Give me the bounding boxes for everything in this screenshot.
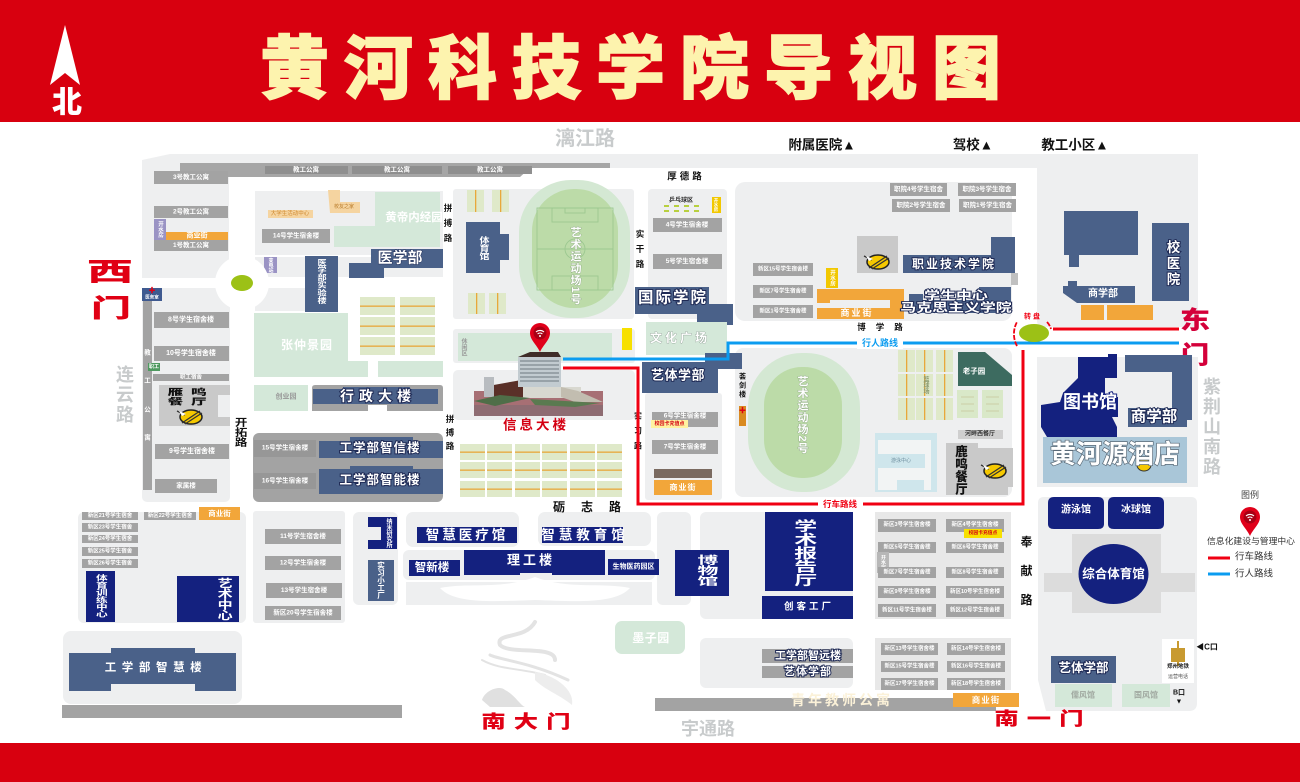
panel: 黄帝内经园 and medical school: 大学生活动中心: [271, 209, 310, 217]
panel: new district dorms north: 新区3号学生宿舍楼: [883, 520, 931, 528]
panel: stadium 2: [748, 353, 860, 492]
panel: 老子园: 老子园: [963, 366, 985, 376]
panel: 国际学院: 国际学院: [638, 288, 708, 306]
panel: 张仲景园 and courts: [254, 297, 443, 377]
panel: new district dorms north: 新区11号学生宿舍楼: [882, 606, 932, 614]
panel: gym and courts: 体育馆: [478, 235, 490, 261]
panel: west dorms: [142, 286, 230, 493]
heading: 西门: [87, 258, 133, 323]
panel: east gate roundabout: 转盘: [1024, 312, 1042, 320]
panel: 纳米研究所 and 实习工厂: [368, 517, 397, 601]
panel: 纳米研究所 and 实习工厂: 纳米研究所: [385, 517, 392, 549]
panel: vocational college area: 马克思主义学院: [900, 300, 1012, 315]
panel: west dorms: 家属楼: [176, 480, 196, 490]
panel: west dorms: 职工宿舍: [180, 372, 202, 380]
panel: 工学部智信楼 and 智能楼: 工学部智信楼: [339, 440, 421, 455]
panel: 黄帝内经园 and medical school: 黄帝内经园: [385, 210, 443, 224]
panel: tennis courts: [957, 390, 1003, 418]
panel: west new dorms: 新区24号学生宿舍: [88, 534, 133, 542]
panel: 工学部智远楼 and dorms south: 新区13号学生宿舍楼: [884, 644, 935, 652]
header band: [0, 0, 1300, 122]
panel: vocational college area: 职院4号学生宿舍: [894, 184, 944, 193]
panel: northwest staff apartments: 开水房: [157, 221, 164, 239]
road label: 拼搏路 south: 拼搏路: [445, 414, 455, 455]
heading: 西门: 门: [91, 295, 131, 323]
icon: metro logo: 运营电话: [1168, 673, 1188, 680]
panel: east courts: 篮球场: [922, 375, 929, 395]
icon: metro logo: [1162, 639, 1194, 683]
panel: 黄帝内经园 and medical school: 14号学生宿舍楼: [273, 230, 320, 240]
panel: 张仲景园 and courts: 张仲景园: [281, 337, 333, 352]
legend: 行人路线: [1235, 568, 1273, 580]
icon: metro logo: 郑州地铁: [1167, 662, 1189, 670]
panel: dorms 11-13 and 20: 11号学生宿舍楼: [280, 531, 326, 540]
panel: 6 and 7 dorms: 7号学生宿舍楼: [664, 442, 707, 450]
panel: 6 and 7 dorms: 校园卡充值点: [654, 420, 685, 427]
heading: 南大门: 南大门: [481, 711, 579, 732]
panel: 智慧 buildings: 智慧教育馆: [541, 526, 629, 542]
panel: south courts: [460, 444, 622, 497]
landmark: 教工小区: 教工小区▲: [1041, 138, 1109, 152]
road label: 紫荆山南路: 紫荆山南路: [1201, 377, 1221, 477]
panel: west dorms: ✚: [148, 286, 156, 294]
panel: west new dorms: 体育训练中心: [93, 573, 108, 618]
panel: 黄帝内经园 and medical school: 校友之家: [334, 203, 354, 210]
panel: west new dorms: 新区25号学生宿舍: [88, 546, 133, 554]
panel: 荟剑楼 and clinic: 荟剑楼: [738, 372, 746, 400]
panel: 国际学院: [635, 287, 733, 325]
panel: 6 and 7 dorms: 商业街: [670, 482, 696, 492]
panel: 工学部智慧楼: [69, 648, 236, 691]
southwest road strip: [62, 705, 402, 718]
panel: 荟剑楼 and clinic: ✚: [739, 406, 746, 414]
panel: new district dorms north: 新区6号学生宿舍楼: [951, 542, 999, 550]
top staff apartment strip: 教工公寓: [293, 164, 320, 174]
panel: new district dorms north: 新区9号学生宿舍楼: [883, 587, 931, 595]
panel: vocational college area: 商业街: [840, 307, 874, 318]
panel: vocational college area: 职院1号学生宿舍: [963, 200, 1013, 209]
heading: 东门: 门: [1181, 341, 1209, 369]
panel: 博物馆: [675, 550, 729, 596]
panel: west new dorms: 新区21号学生宿舍: [88, 511, 133, 519]
panel: vocational college area: 开水房: [829, 270, 836, 288]
label: B口: ▼: [1176, 698, 1182, 706]
panel: west dorms: 10号学生宿舍楼: [166, 348, 216, 357]
panel: light blue pool: [875, 433, 937, 492]
panel: new district dorms north: 新区12号学生宿舍楼: [950, 606, 1001, 614]
icon: info pin: [530, 323, 550, 352]
legend: 图例: [1241, 489, 1259, 500]
panel: west dorms: 寓: [144, 432, 151, 442]
top staff apartment strip: [180, 163, 610, 177]
panel: 艺体学部 north: 艺体学部: [651, 368, 705, 382]
road label: 博学路: 博学路: [857, 322, 913, 332]
panel: west dorms: 教: [144, 348, 151, 356]
panel: 博物馆: 博物馆: [694, 554, 718, 586]
panel: 信息大楼 photo: [474, 352, 603, 416]
panel: 4 and 5 dorms: 5号学生宿舍楼: [666, 256, 709, 265]
panel: 学术报告厅: 创客工厂: [784, 600, 834, 612]
panel: 艺体学部 north: [642, 353, 742, 393]
road label: 漓江路: 漓江路: [555, 126, 615, 150]
panel: northwest staff apartments: 2号教工公寓: [173, 206, 210, 216]
panel: sports complex: 综合体育馆: [1082, 566, 1145, 581]
panel: sports complex: [1044, 497, 1195, 613]
heading: 西门: 西: [87, 258, 133, 286]
panel: 智慧 buildings: 理工楼: [507, 552, 555, 568]
road label: 奉献路: 奉献路: [1019, 534, 1033, 622]
panel: 文化广场 and garden strip: [458, 322, 727, 361]
label: B口: [1173, 690, 1185, 706]
panel: new district dorms north: 新区4号学生宿舍楼: [951, 520, 999, 528]
panel: 工学部智信楼 and 智能楼: [253, 433, 443, 502]
panel: 工学部智远楼 and dorms south: 艺体学部: [784, 664, 832, 678]
panel: new district dorms north: [877, 519, 1004, 617]
panel: 黄帝内经园 and medical school: 医学部实验楼: [317, 258, 327, 305]
routes: 行人路线: [862, 337, 898, 348]
campus ground blocks: [63, 154, 1198, 711]
panel: dorms 11-13 and 20: [265, 529, 342, 620]
panel: 工学部智信楼 and 智能楼: 16号学生宿舍楼: [262, 476, 309, 484]
panel: 纳米研究所 and 实习工厂: 实习小工厂: [376, 560, 386, 600]
panel: east courts: [898, 350, 953, 420]
routes: [563, 329, 1179, 510]
icon: north arrow: [50, 25, 82, 120]
panel: 文化广场 and garden strip: 文化广场: [650, 330, 710, 345]
panel: vocational college area: 新区7号学生宿舍楼: [759, 286, 807, 294]
label: C口: ◀C口: [1196, 642, 1218, 652]
footer band: [0, 743, 1300, 782]
road label: 宇通路: 宇通路: [681, 719, 735, 739]
panel: new district dorms north: 新区8号学生宿舍楼: [951, 568, 999, 576]
panel: new district dorms north: 新区10号学生宿舍楼: [950, 587, 1001, 595]
panel: west new dorms: 新区22号学生宿舍: [148, 511, 193, 519]
panel: NE buildings: [1063, 211, 1189, 320]
panel: 行政大楼: [254, 385, 443, 411]
legend: 行车路线: [1235, 550, 1273, 562]
road label: 拼搏路 north: 拼搏路: [443, 203, 453, 248]
panel: northwest staff apartments: 商业街: [186, 230, 208, 240]
top staff apartment strip: 教工公寓: [477, 164, 504, 174]
panel: NE buildings: 商学部: [1088, 286, 1118, 300]
panel: new district dorms north: 新区7号学生宿舍楼: [883, 568, 931, 576]
panel: west dorms: 8号学生宿舍楼: [168, 314, 214, 324]
panel: 老子园: [958, 352, 1012, 386]
panel: stadium 2: 艺术运动场2号: [796, 374, 808, 455]
landmark: 驾校: 驾校▲: [953, 136, 993, 152]
legend: 信息化建设与管理中心: [1207, 535, 1295, 546]
panel: west new dorms: 商业街: [208, 508, 231, 518]
road label: 厚德路: 厚德路: [667, 170, 705, 182]
panel: vocational college area: 职业技术学院: [912, 256, 996, 271]
panel: 智慧 buildings: 生物医药园区: [612, 562, 654, 570]
landmark: 附属医院: 附属医院▲: [788, 136, 856, 152]
heading: 东门: [1180, 306, 1210, 369]
panel: 荟剑楼 and clinic: [738, 372, 746, 426]
panel: northwest staff apartments: [154, 171, 228, 251]
panel: 青年教师公寓 strip: 商业街: [972, 695, 1000, 705]
panel: 艺体学部 south: 国风馆: [1134, 690, 1158, 700]
panel: 工学部智远楼 and dorms south: 新区14号学生宿舍楼: [951, 644, 1002, 652]
road label: 砺志路: 砺志路: [553, 499, 637, 514]
panel: 图书馆 商学部 酒店: 商学部: [1131, 406, 1178, 426]
panel: 智慧 buildings: 智新楼: [415, 560, 450, 574]
panel: dorms 11-13 and 20: 12号学生宿舍楼: [280, 558, 327, 566]
panel: west dorms: 职工: [149, 364, 159, 370]
panel: 6 and 7 dorms: 6号学生宿舍楼: [664, 410, 707, 420]
panel: stadium 1: [519, 180, 630, 318]
panel: 工学部智远楼 and dorms south: [762, 643, 1005, 690]
panel: west new dorms: 新区23号学生宿舍: [88, 522, 133, 530]
panel: new district dorms north: 新区5号学生宿舍楼: [883, 542, 931, 550]
panel: light blue pool: 游泳中心: [891, 457, 911, 464]
heading: 南一门: 南一门: [994, 708, 1092, 729]
panel: 行政大楼: 行政大楼: [340, 388, 416, 404]
panel: 文化广场 and garden strip: 休闲区: [460, 337, 467, 356]
label: 信息大楼: 信息大楼: [503, 416, 569, 432]
panel: 工学部智远楼 and dorms south: 新区18号学生宿舍楼: [951, 679, 1002, 687]
panel: dorms 11-13 and 20: 13号学生宿舍楼: [281, 585, 328, 594]
panel: 墨子园: [615, 621, 685, 654]
panel: west dorms: 9号学生宿舍楼: [169, 446, 215, 455]
panel: 6 and 7 dorms: [651, 410, 718, 495]
panel: 工学部智远楼 and dorms south: 新区17号学生宿舍楼: [884, 679, 935, 687]
panel: 墨子园: 墨子园: [632, 631, 670, 645]
panel: 图书馆 商学部 酒店: 黄河源酒店: [1050, 439, 1180, 469]
road label: 开拓路: 开拓路: [233, 417, 247, 448]
top staff apartment strip: 教工公寓: [384, 164, 410, 174]
panel: northwest staff apartments: 1号教工公寓: [173, 240, 210, 249]
panel: gym and courts: [466, 190, 509, 314]
panel: 黄帝内经园 and medical school: 变电站: [268, 257, 274, 274]
panel: stadium 1: 艺术运动场1号: [569, 225, 582, 306]
panel: west dorms: 工: [144, 378, 151, 384]
panel: 4 and 5 dorms: [653, 196, 722, 269]
panel: new district dorms north: 校园卡充值点: [969, 529, 998, 536]
panel: 工学部智信楼 and 智能楼: 15号学生宿舍楼: [262, 442, 309, 452]
title: 黄河科技学院导视图: [260, 30, 1016, 108]
road label: 实干路: 实干路: [635, 229, 645, 274]
panel: vocational college area: 新区15号学生宿舍楼: [758, 264, 809, 272]
panel: 艺体学部 south: 艺体学部: [1058, 660, 1109, 675]
panel: dorms 11-13 and 20: 新区20号学生宿舍楼: [273, 608, 333, 616]
panel: 鹿鸣餐厅: 河畔西餐厅: [965, 430, 995, 438]
panel: 4 and 5 dorms: 4号学生宿舍楼: [666, 220, 709, 228]
panel: vocational college area: 职院3号学生宿舍: [962, 184, 1012, 193]
panel: east gate roundabout: [1014, 312, 1051, 346]
panel: sports complex: 游泳馆: [1061, 502, 1091, 516]
panel: vocational college area: [753, 183, 1018, 319]
panel: vocational college area: 职院2号学生宿舍: [896, 200, 946, 209]
panel: 工学部智远楼 and dorms south: 新区15号学生宿舍楼: [884, 662, 935, 670]
panel: 鹿鸣餐厅: [946, 430, 1013, 496]
panel: 学术报告厅: 学术报告厅: [792, 518, 817, 587]
panel: 青年教师公寓 strip: 青年教师公寓: [791, 692, 893, 708]
panel: west dorms: 医务室: [145, 294, 159, 300]
road label: 连云路: 连云路: [114, 365, 134, 425]
panel: 行政大楼: 创业园: [276, 392, 296, 400]
panel: west new dorms: 新区26号学生宿舍: [88, 558, 133, 566]
panel: 智慧 buildings: [409, 526, 659, 576]
icon: north arrow: 北: [52, 86, 82, 120]
panel: 工学部智远楼 and dorms south: 工学部智远楼: [775, 648, 841, 662]
panel: 学术报告厅: [762, 512, 853, 619]
panel: vocational college area: 新区1号学生宿舍楼: [759, 306, 807, 314]
panel: 图书馆 商学部 酒店: 图书馆: [1063, 391, 1117, 412]
panel: 工学部智慧楼: 工学部智慧楼: [105, 660, 207, 674]
panel: sports complex: 冰球馆: [1121, 502, 1151, 516]
panel: 黄帝内经园 and medical school: 医学部: [377, 248, 423, 266]
panel: 青年教师公寓 strip: [655, 692, 1019, 711]
decoration: yellow river sculpture: [440, 577, 630, 707]
panel: 图书馆 商学部 酒店: [1041, 354, 1192, 483]
panel: northwest staff apartments: 3号教工公寓: [173, 172, 210, 181]
panel: west new dorms: 艺术中心: [215, 577, 233, 620]
panel: west dorms: 雁鸣: [168, 387, 214, 397]
label: B口: B口: [1173, 690, 1185, 696]
panel: NE buildings: 校医院: [1164, 239, 1180, 288]
panel: west new dorms: [82, 507, 240, 622]
panel: west dorms: 公: [144, 406, 151, 414]
panel: new district dorms north: 开水房: [880, 554, 886, 571]
legend: [1207, 489, 1295, 580]
heading: 东门: 东: [1180, 306, 1210, 334]
panel: 鹿鸣餐厅: 鹿鸣餐厅: [953, 444, 967, 496]
panel: 工学部智信楼 and 智能楼: 工学部智能楼: [339, 472, 421, 487]
panel: vocational college area: 学生中心: [924, 288, 988, 303]
routes: 行车路线: [823, 499, 857, 509]
road label: 实习路: 实习路: [634, 411, 642, 456]
panel: 智慧 buildings: 智慧医疗馆: [426, 526, 508, 542]
west roundabout: [215, 256, 269, 310]
panel: 艺体学部 south: 儒风馆: [1071, 690, 1095, 700]
panel: 工学部智远楼 and dorms south: 新区16号学生宿舍楼: [951, 662, 1002, 670]
panel: 4 and 5 dorms: 乒乓球区: [669, 196, 693, 204]
panel: 艺体学部 south: [1051, 656, 1170, 707]
panel: 黄帝内经园 and medical school: [262, 190, 443, 312]
panel: 4 and 5 dorms: 开水房: [713, 198, 719, 213]
panel: west dorms: 餐厅: [168, 397, 214, 407]
